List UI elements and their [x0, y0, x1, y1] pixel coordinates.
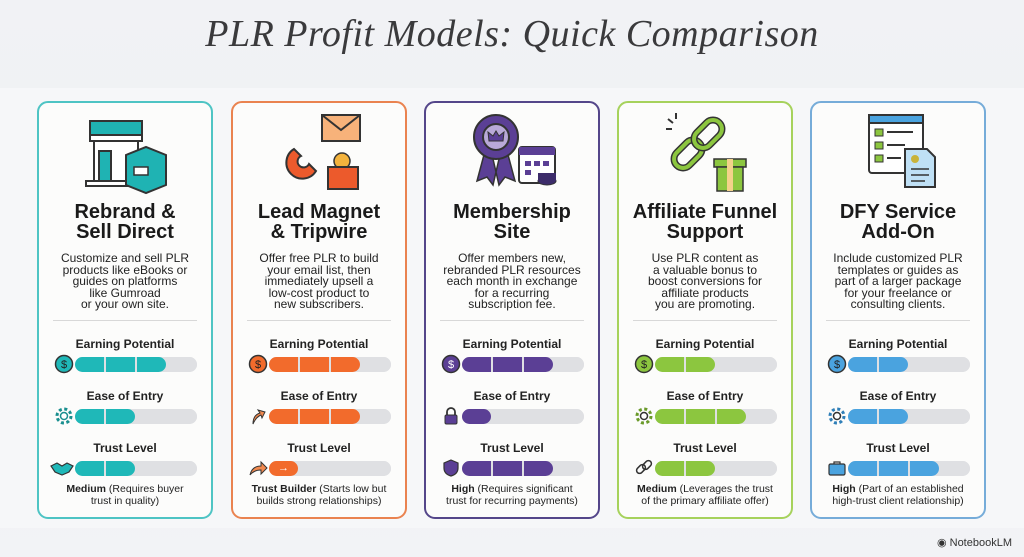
footnote: [66, 483, 184, 507]
label: earning potential: Earning Potential: [270, 337, 368, 351]
icon: dollar: $: [61, 359, 67, 371]
heading: Site: [494, 221, 530, 243]
description: a valuable bonus to: [653, 263, 757, 277]
icon: dollar: [442, 354, 460, 374]
label: ease: Ease of Entry: [281, 389, 357, 403]
label: ease: Ease of Entry: [860, 389, 936, 403]
panel: affiliate funnel support: [617, 101, 793, 519]
footnote: Medium (Leverages the trust: [637, 483, 773, 495]
bar: trust: [75, 461, 197, 476]
description: Include customized PLR: [833, 251, 963, 265]
heading: [840, 201, 956, 243]
heading: Membership: [453, 201, 571, 223]
icon: dollar: [634, 354, 654, 374]
bar: trust: [848, 461, 970, 476]
icon: dollar: [54, 354, 74, 374]
description: [443, 251, 581, 311]
panel: membership site: [424, 101, 600, 519]
description: each month in exchange: [447, 274, 577, 288]
label: trust: Trust Level: [93, 441, 157, 455]
icon: dollar: $: [448, 359, 454, 371]
footnote: Trust Builder (Starts low but: [252, 483, 386, 495]
description: Customize and sell PLR: [61, 251, 189, 265]
description: [259, 251, 379, 311]
description: new subscribers.: [274, 297, 364, 311]
description: consulting clients.: [851, 297, 945, 311]
description: boost conversions for: [648, 274, 762, 288]
bar: ease: [655, 409, 777, 424]
heading: Sell Direct: [76, 221, 174, 243]
description: subscription fee.: [468, 297, 556, 311]
bar: ease: [75, 409, 197, 424]
footnote: trust for recurring payments): [446, 495, 578, 507]
icon: handshake: [50, 462, 74, 476]
panel: lead magnet & tripwire: [231, 101, 407, 519]
logo: NotebookLM: ◉ NotebookLM: [937, 537, 1012, 549]
icon: dollar: $: [641, 359, 647, 371]
bar: trust: [462, 461, 584, 476]
heading: [74, 201, 176, 243]
bar: trust: [269, 461, 391, 476]
description: you are promoting.: [655, 297, 755, 311]
heading: & Tripwire: [271, 221, 367, 243]
icon: up arrow: [252, 409, 266, 424]
footnote: high-trust client relationship): [832, 495, 964, 507]
footnote: [252, 483, 386, 507]
label: trust: Trust Level: [866, 441, 930, 455]
description: rebranded PLR resources: [443, 263, 581, 277]
description: [648, 251, 762, 311]
description: affiliate products: [661, 286, 749, 300]
label: earning potential: Earning Potential: [76, 337, 174, 351]
description: for a recurring: [475, 286, 549, 300]
label: earning: Earning Potential: [463, 337, 561, 351]
label: trust: Trust Level: [287, 441, 351, 455]
label: trust: Trust Level: [480, 441, 544, 455]
label: trust: Trust Level: [673, 441, 737, 455]
footnote: trust in quality): [91, 495, 159, 507]
description: products like eBooks or: [63, 263, 187, 277]
icon: dollar: [828, 354, 846, 374]
label: ease: Ease of Entry: [474, 389, 550, 403]
footnote: [832, 483, 964, 507]
heading: [453, 201, 571, 243]
description: Offer members new,: [458, 251, 566, 265]
icon: chain: [636, 460, 652, 474]
label: earning: Earning Potential: [656, 337, 754, 351]
bar: trust: →: [278, 462, 289, 474]
bar: earning: [655, 357, 777, 372]
heading: [633, 201, 777, 243]
heading: Support: [667, 221, 743, 243]
icon: lock: [444, 407, 458, 424]
description: part of a larger package: [835, 274, 961, 288]
heading: Lead Magnet: [258, 201, 380, 223]
bar: ease: [848, 409, 970, 424]
panel: DFY service add-on: [810, 101, 986, 519]
panel: rebrand & sell direct: [37, 101, 213, 519]
bar: ease: [462, 409, 584, 424]
icon: checklist window and document: [868, 114, 936, 188]
description: low-cost product to: [269, 286, 369, 300]
description: your email list, then: [267, 263, 371, 277]
description: like Gumroad: [89, 286, 161, 300]
description: templates or guides as: [838, 263, 958, 277]
heading: DFY Service: [840, 201, 956, 223]
heading: [258, 201, 380, 243]
description: [833, 251, 963, 311]
icon: shield: [443, 459, 459, 477]
footnote: High (Part of an established: [832, 483, 964, 495]
bar: earning: [848, 357, 970, 372]
icon: dollar: $: [834, 359, 840, 371]
heading: Rebrand &: [74, 201, 176, 223]
label: ease of entry: Ease of Entry: [87, 389, 163, 403]
description: Offer free PLR to build: [259, 251, 379, 265]
heading: Affiliate Funnel: [633, 201, 777, 223]
footnote: [637, 483, 773, 507]
icon: chain link and gift: [666, 113, 747, 192]
footnote: builds strong relationships): [257, 495, 381, 507]
description: immediately upsell a: [265, 274, 373, 288]
description: guides on platforms: [73, 274, 177, 288]
icon: storefront and box: [85, 120, 167, 194]
icon: badge and calendar: [473, 114, 556, 187]
bar: trust: [655, 461, 777, 476]
footnote: [446, 483, 578, 507]
icon: magnet, envelope, cash: [285, 114, 361, 190]
heading: Add-On: [861, 221, 935, 243]
label: earning: Earning Potential: [849, 337, 947, 351]
description: Use PLR content as: [652, 251, 758, 265]
icon: briefcase: [828, 461, 846, 476]
footnote: of the primary affiliate offer): [641, 495, 769, 507]
icon: dollar: $: [255, 359, 261, 371]
icon: gear: [636, 408, 652, 424]
description: [61, 251, 189, 311]
footnote: High (Requires significant: [451, 483, 573, 495]
bar: earning: [269, 357, 391, 372]
bar: earning potential: [75, 357, 197, 372]
description: for your freelance or: [844, 286, 952, 300]
icon: gear: [828, 408, 846, 424]
title: PLR Profit Models: Quick Comparison: [205, 13, 819, 55]
icon: dollar: [248, 354, 268, 374]
bar: ease: [269, 409, 391, 424]
label: ease: Ease of Entry: [667, 389, 743, 403]
description: or your own site.: [81, 297, 169, 311]
footnote: Medium (Requires buyer: [66, 483, 184, 495]
bar: earning: [462, 357, 584, 372]
icon: gear: [56, 408, 72, 424]
icon: curved arrow: [250, 460, 268, 476]
